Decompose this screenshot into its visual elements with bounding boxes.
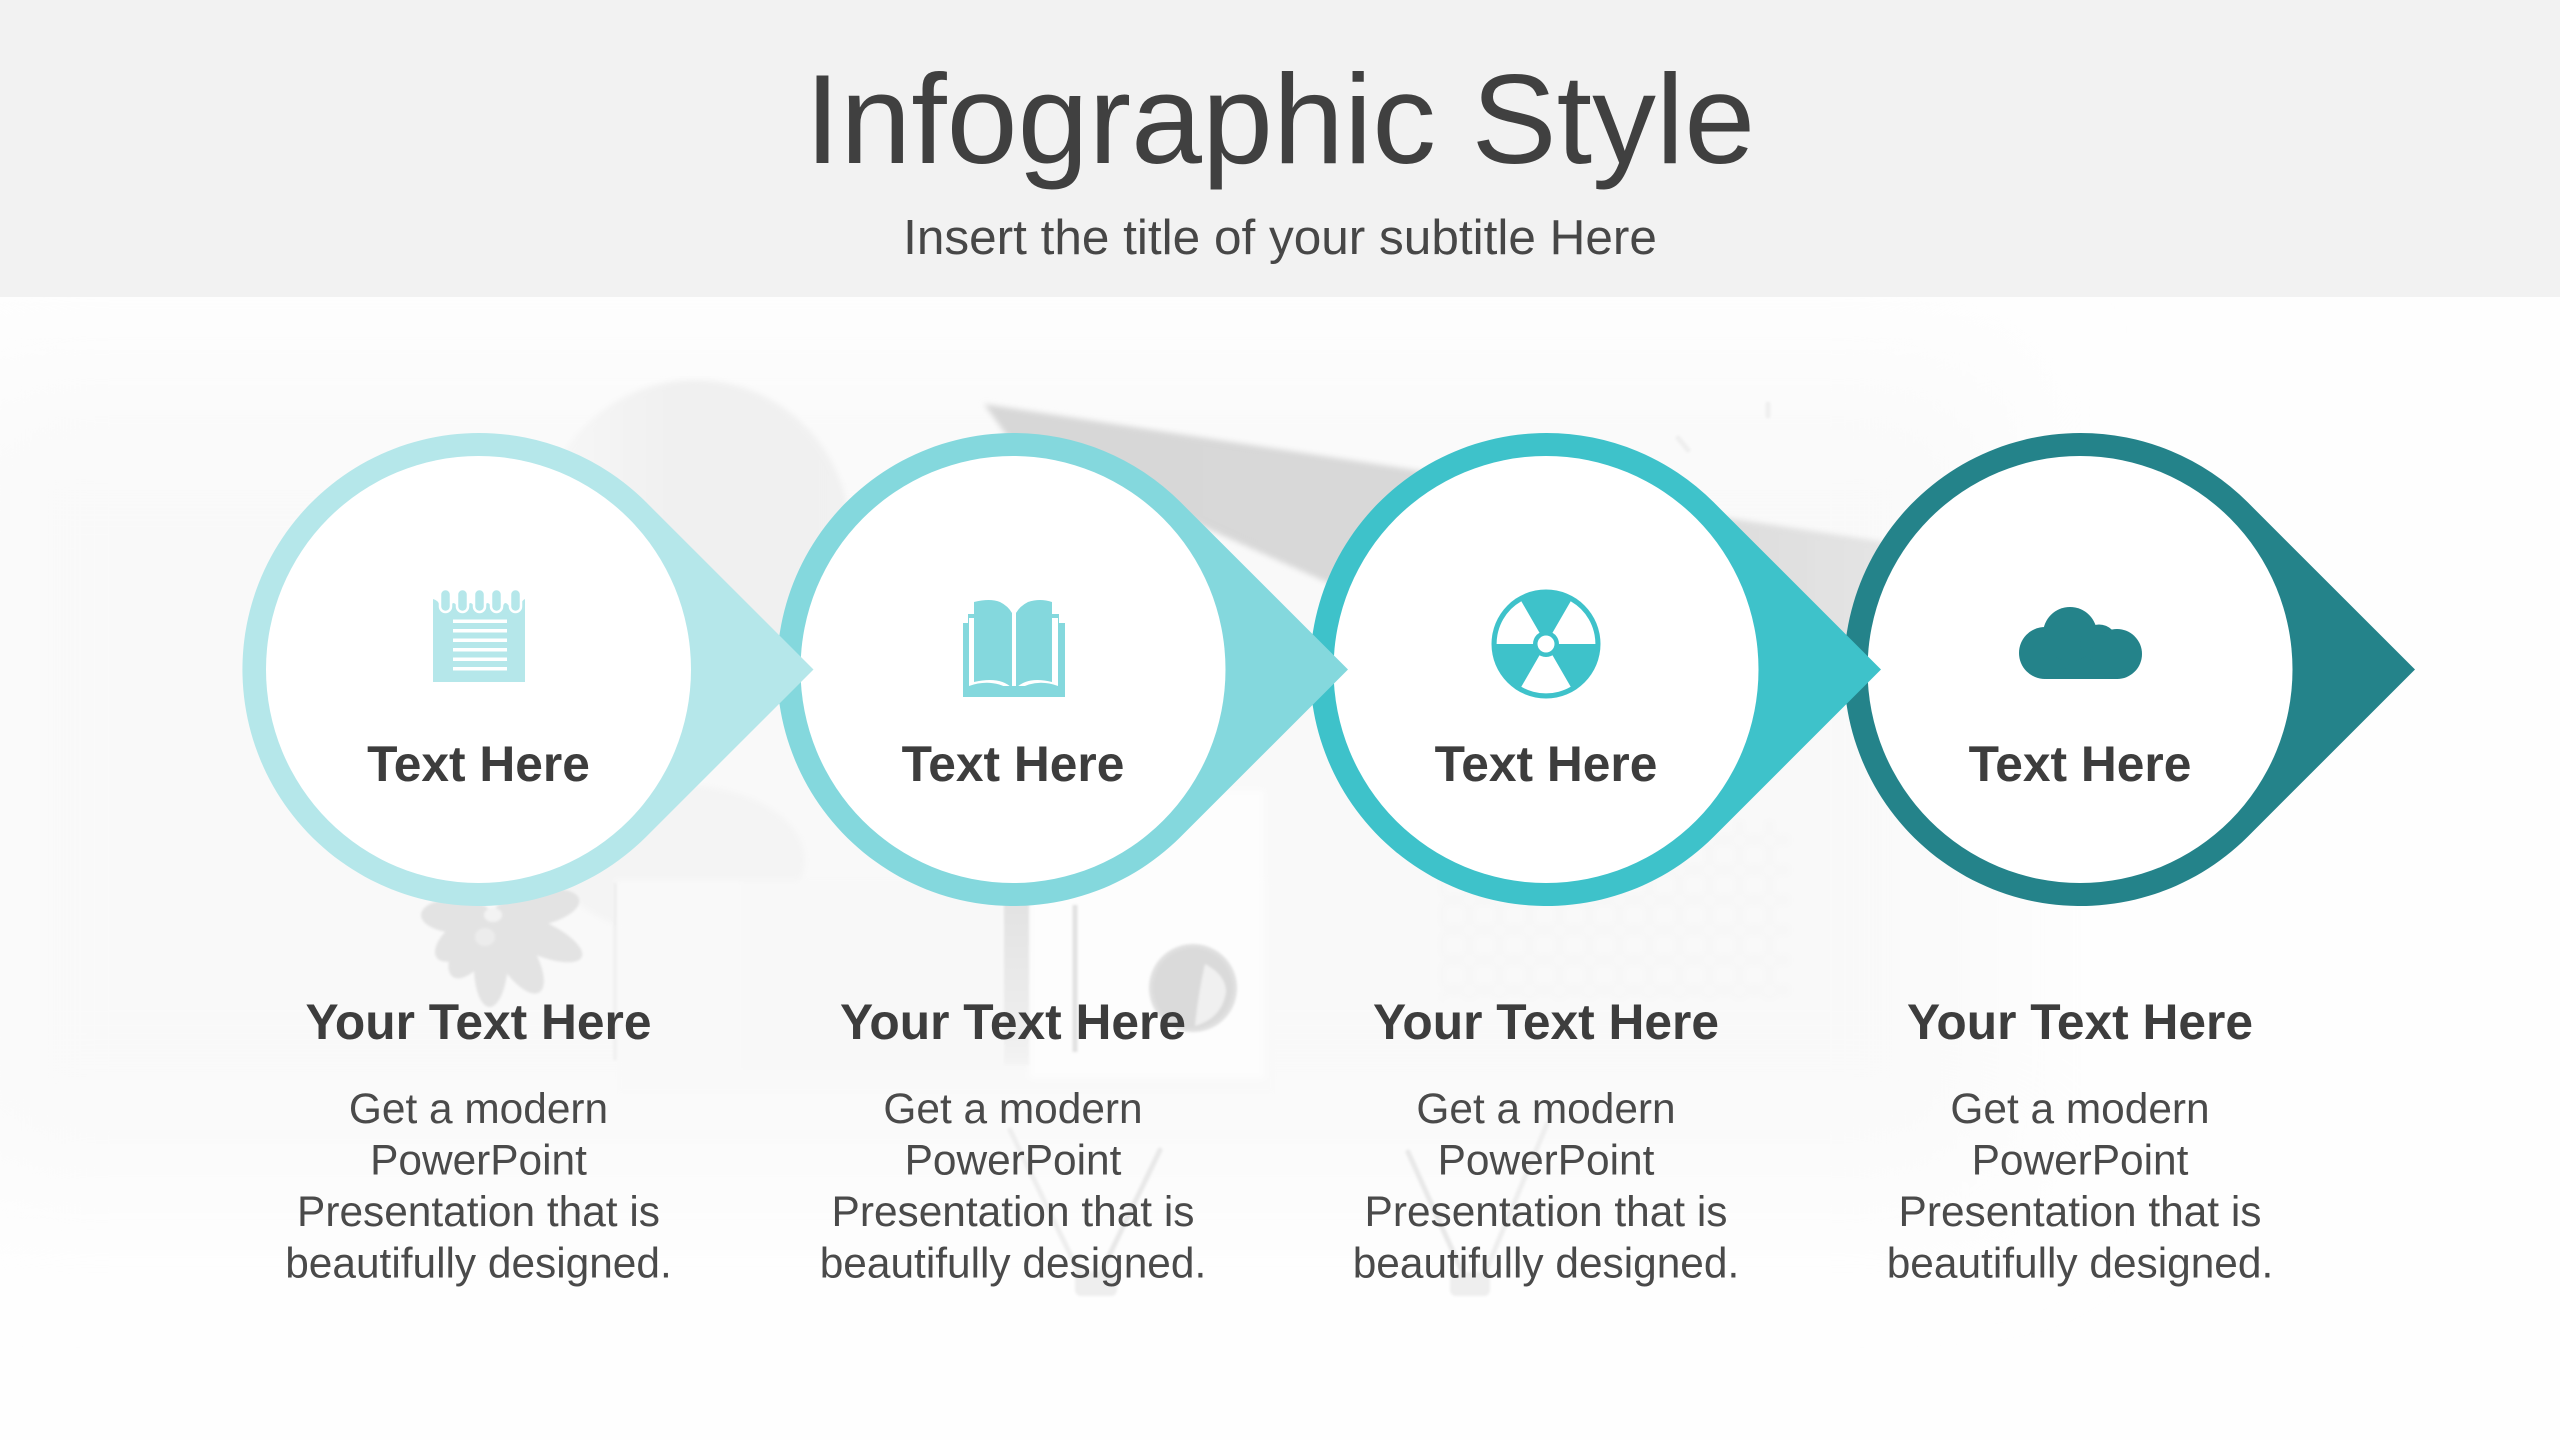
coffee cup — [1151, 946, 1235, 1030]
icon: radiation — [1492, 590, 1600, 698]
heading 1: Your Text Here — [305, 994, 652, 1050]
body 2: beautifully designed. — [820, 1240, 1206, 1286]
body 3: PowerPoint — [1438, 1136, 1655, 1184]
header band — [0, 0, 2560, 297]
teardrop badge 3 — [1310, 433, 1881, 906]
body 4: PowerPoint — [1972, 1136, 2189, 1184]
text block 1 — [285, 994, 672, 1286]
small desk marks — [1678, 404, 1768, 450]
text block 3 — [1353, 994, 1739, 1286]
text block 4 — [1887, 994, 2273, 1286]
panel: step 1 — [242, 433, 814, 906]
heading 2: Your Text Here — [840, 994, 1186, 1050]
icon: notepad — [433, 589, 525, 682]
label 3: Text Here — [1435, 736, 1657, 792]
subtitle: Insert the title of your subtitle Here — [903, 210, 1657, 265]
body 4: Get a modern — [1950, 1085, 2210, 1132]
body 1: beautifully designed. — [285, 1240, 672, 1286]
title: Infographic Style — [805, 48, 1755, 191]
label 1: Text Here — [367, 736, 590, 792]
body 2: Get a modern — [883, 1085, 1143, 1132]
heading 4: Your Text Here — [1907, 994, 2253, 1050]
body 3: Presentation that is — [1365, 1188, 1727, 1235]
panel: step 3 — [1310, 433, 1881, 906]
heading 3: Your Text Here — [1373, 994, 1719, 1050]
body 4: beautifully designed. — [1887, 1240, 2273, 1286]
inner circle 1 — [266, 456, 691, 883]
cables — [1010, 1124, 1547, 1285]
icon: open book — [963, 600, 1065, 697]
body 1: Get a modern — [349, 1085, 608, 1132]
body 4: Presentation that is — [1899, 1188, 2261, 1235]
inner circle 3 — [1334, 456, 1758, 883]
label 2: Text Here — [902, 736, 1124, 792]
body 2: Presentation that is — [832, 1188, 1194, 1235]
body 2: PowerPoint — [905, 1136, 1122, 1184]
teardrop badge 1 — [242, 433, 814, 906]
body 3: Get a modern — [1416, 1085, 1676, 1132]
succulent — [420, 882, 589, 1008]
panel: step 2 — [777, 433, 1348, 906]
body 1: PowerPoint — [370, 1136, 587, 1184]
inner circle 4 — [1868, 456, 2292, 883]
body 1: Presentation that is — [297, 1188, 660, 1235]
teardrop badge 4 — [1844, 433, 2415, 906]
icon: cloud — [2019, 607, 2142, 679]
panel: step 4 — [1844, 433, 2415, 906]
label 4: Text Here — [1969, 736, 2191, 792]
teardrop badge 2 — [777, 433, 1348, 906]
text block 2 — [820, 994, 1206, 1286]
inner circle 2 — [800, 456, 1226, 883]
body 3: beautifully designed. — [1353, 1240, 1739, 1286]
